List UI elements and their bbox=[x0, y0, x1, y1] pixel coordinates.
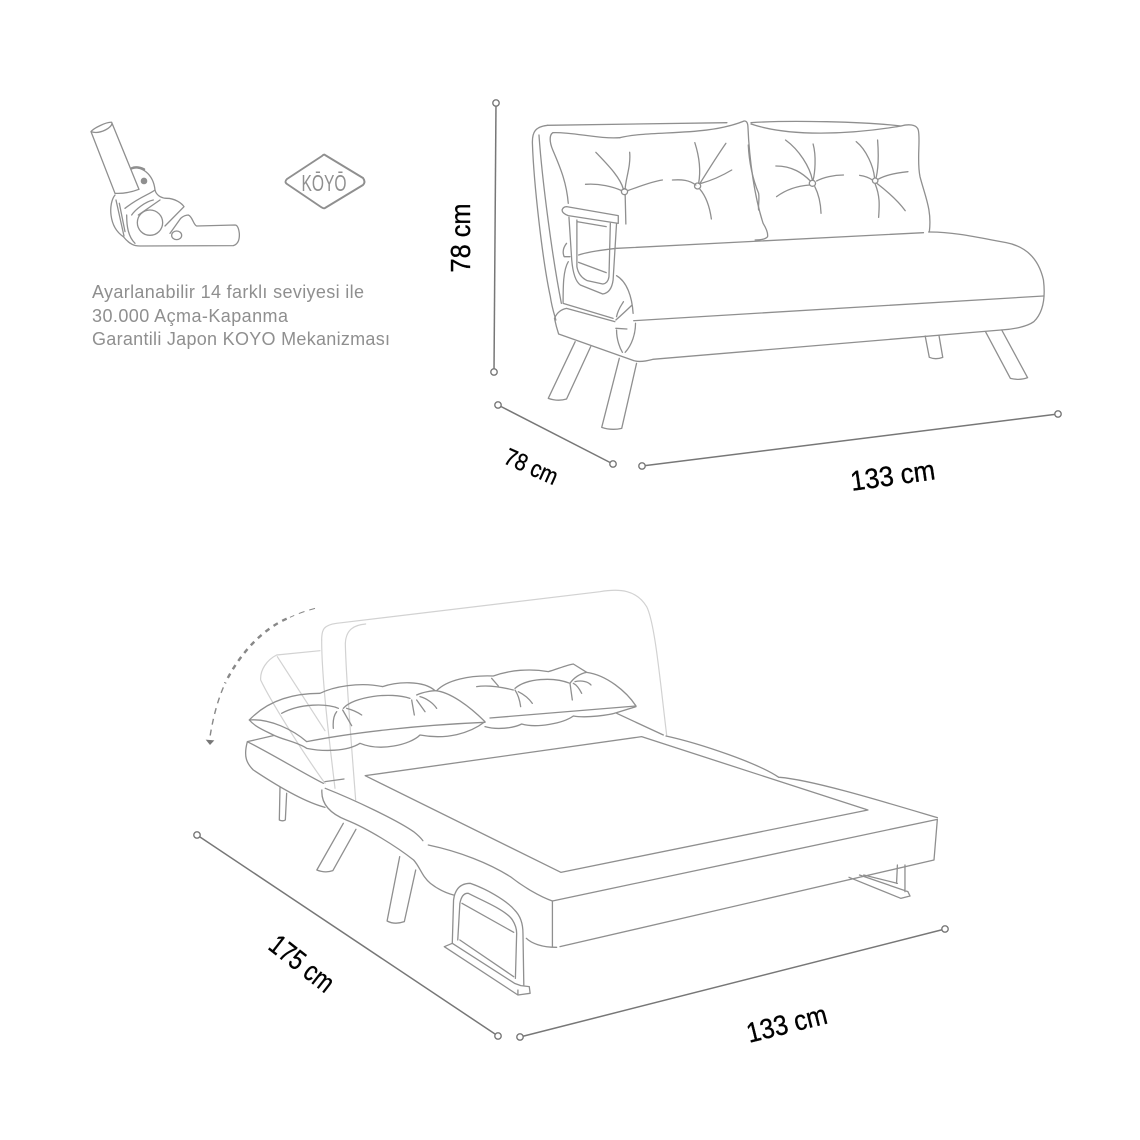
cushions bbox=[246, 664, 663, 821]
text block: mechanism description: Ayarlanabilir 14 farklı seviyesi ile bbox=[92, 282, 364, 302]
dimension line: height 78 cm bbox=[491, 100, 499, 375]
label: width: 133 cm bbox=[848, 454, 937, 497]
illustration: sofa bed, mattress and legs bbox=[317, 736, 937, 995]
dimension line: bed width 133 cm bbox=[517, 926, 948, 1040]
faded backrest bbox=[261, 590, 667, 800]
label: height: 78 cm bbox=[445, 204, 476, 272]
illustration: sofa upright bbox=[532, 121, 1044, 429]
icon: KOYO mechanism bbox=[91, 122, 239, 246]
arrow: folding direction bbox=[206, 608, 315, 745]
text block: mechanism description: Garantili Japon KOYO Mekanizması bbox=[92, 329, 390, 349]
label: depth: 78 cm bbox=[500, 443, 562, 491]
logo: KOYO: KŌYŌ bbox=[302, 170, 346, 196]
illustration: sofa bed, upper part bbox=[206, 590, 667, 821]
dimension line: depth 78 cm bbox=[495, 402, 616, 467]
dimension line: width 133 cm bbox=[639, 411, 1061, 469]
logo: KOYO bbox=[286, 155, 364, 208]
label: bed length: 175 cm bbox=[263, 929, 341, 999]
label: bed width: 133 cm bbox=[743, 999, 830, 1049]
text block: mechanism description: 30.000 Açma-Kapanma bbox=[92, 306, 289, 326]
dimension line: bed length 175 cm bbox=[194, 832, 501, 1039]
text block: mechanism description bbox=[92, 282, 390, 349]
